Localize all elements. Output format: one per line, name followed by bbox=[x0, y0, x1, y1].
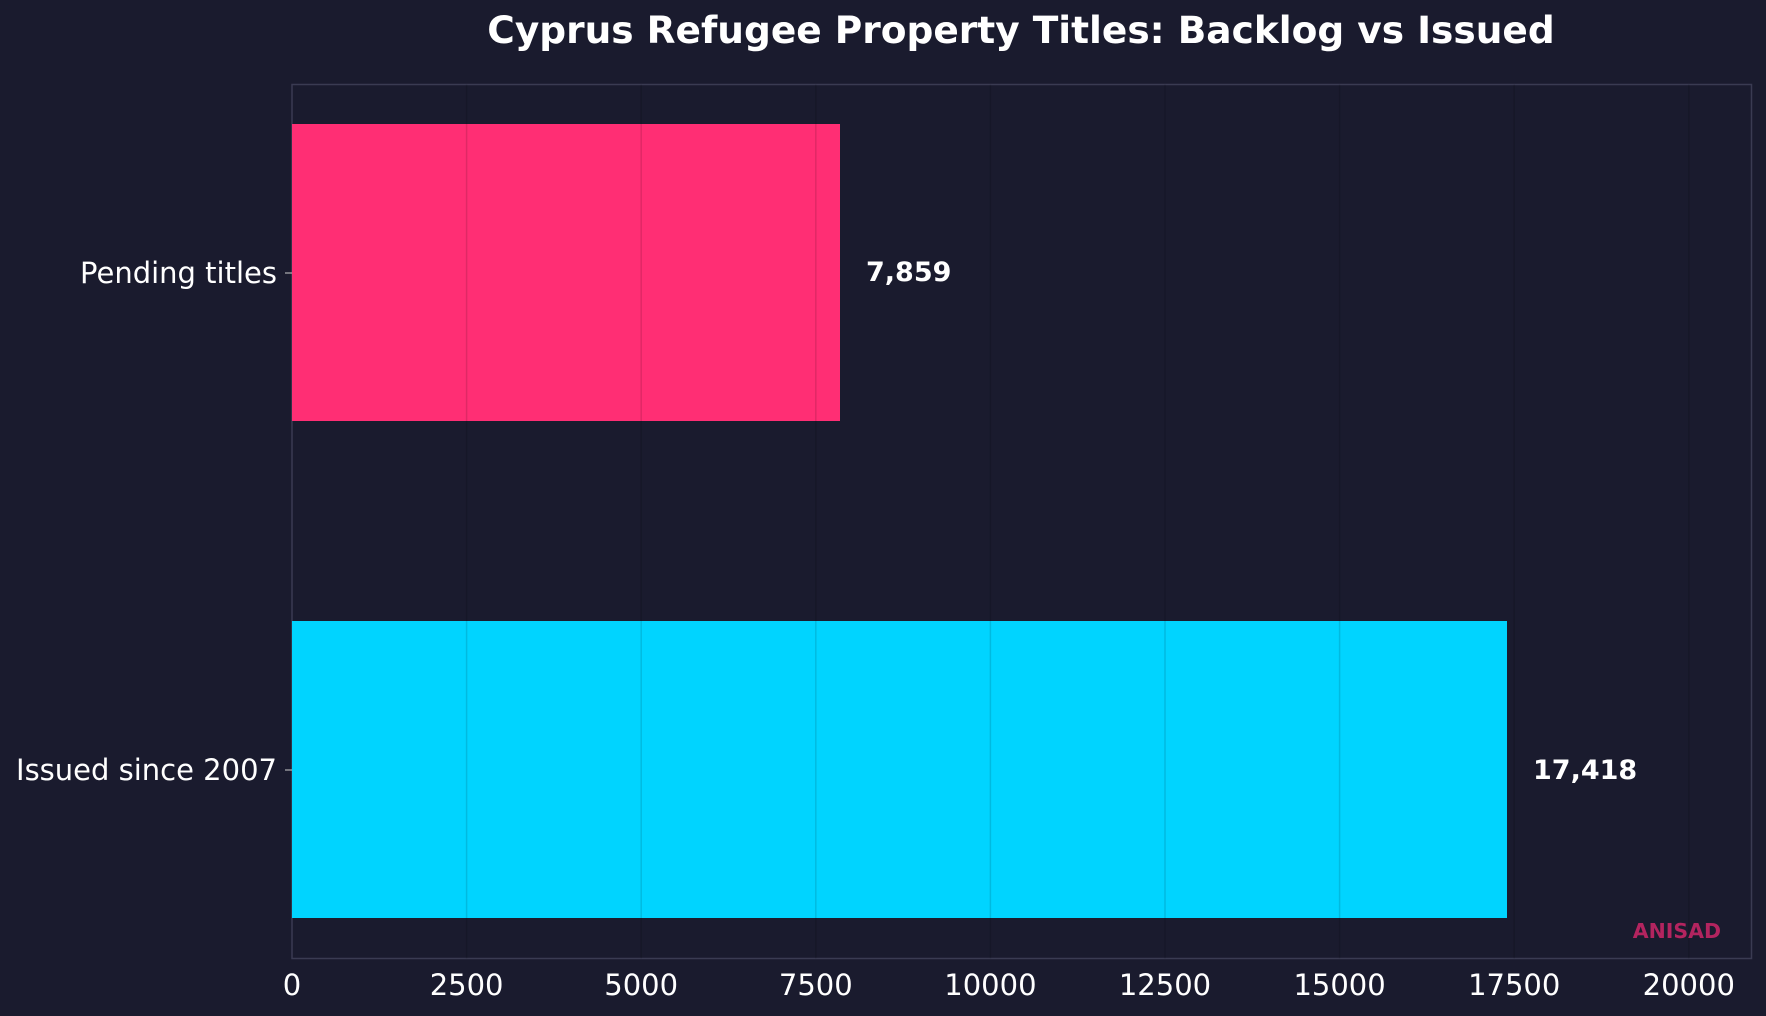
x axis ticks bbox=[283, 968, 1735, 1002]
x axis ticks: 2500 bbox=[430, 968, 504, 1002]
x axis ticks: 10000 bbox=[944, 968, 1037, 1002]
y axis labels bbox=[16, 256, 292, 787]
plot area: 17,418 bbox=[1533, 755, 1637, 786]
y axis labels: Issued since 2007 bbox=[16, 753, 277, 787]
watermark: ANISAD bbox=[1633, 919, 1721, 943]
value labels: 7,859 bbox=[866, 257, 951, 288]
x axis ticks: 17500 bbox=[1468, 968, 1560, 1002]
x axis ticks: 15000 bbox=[1293, 968, 1386, 1002]
y axis labels: Pending titles bbox=[80, 256, 277, 290]
issued bar bbox=[292, 621, 1507, 918]
pending bar bbox=[292, 124, 840, 421]
plot area bbox=[292, 84, 1752, 958]
x axis ticks: 0 bbox=[283, 968, 301, 1002]
x axis ticks: 12500 bbox=[1119, 968, 1211, 1002]
title: Cyprus Refugee Property Titles: Backlog vs Issued bbox=[487, 8, 1555, 52]
x axis ticks: 5000 bbox=[604, 968, 678, 1002]
x axis ticks: 7500 bbox=[779, 968, 853, 1002]
x axis ticks: 20000 bbox=[1643, 968, 1735, 1002]
